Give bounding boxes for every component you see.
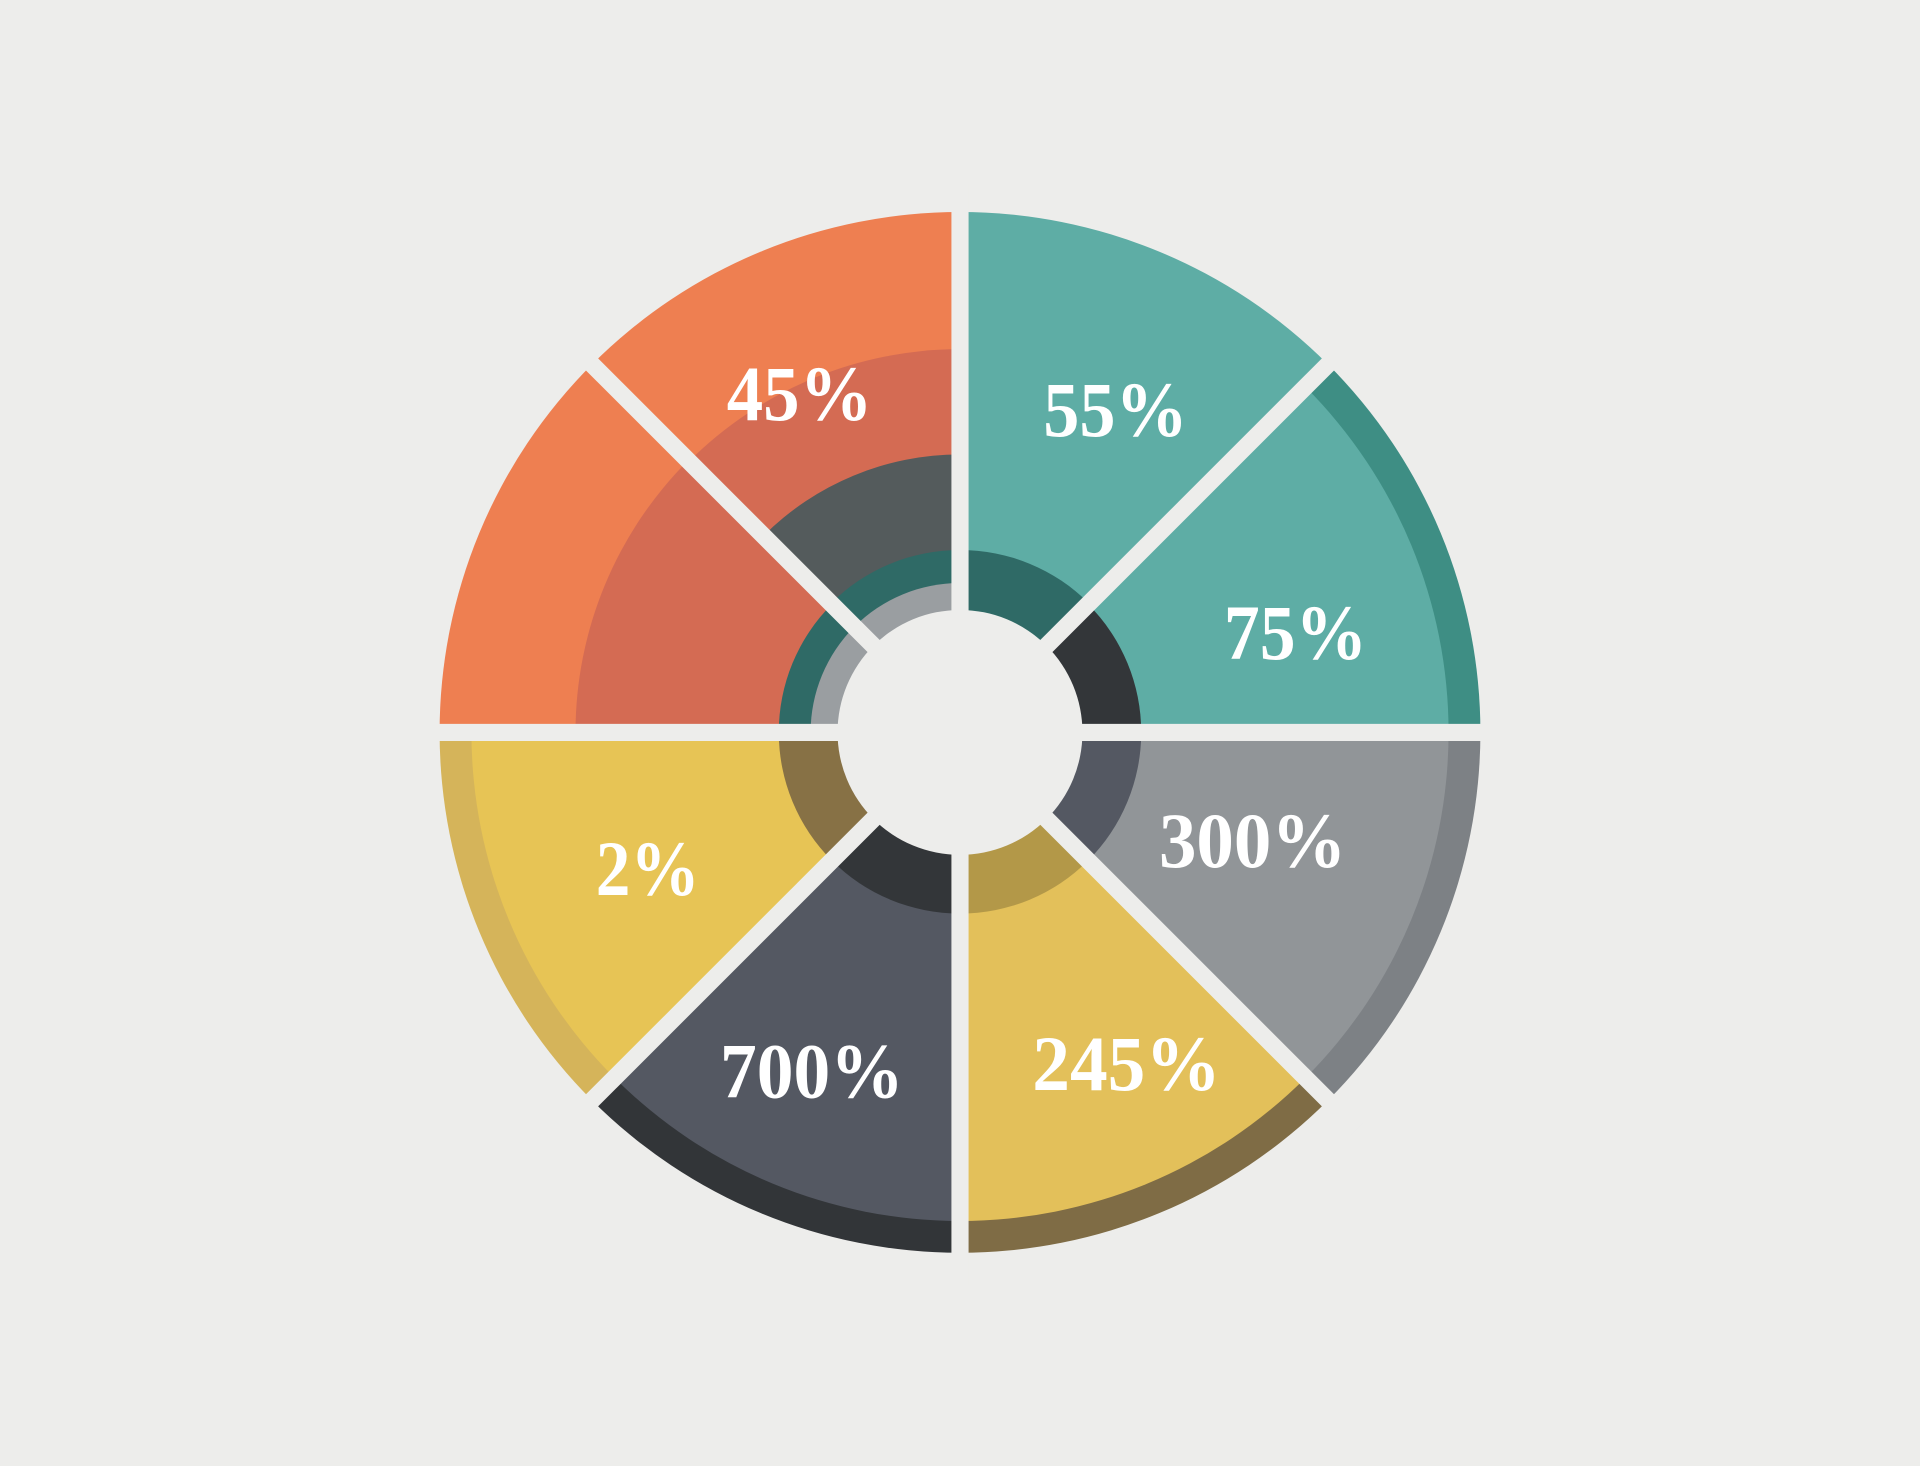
- segment: orange lower: [440, 370, 868, 724]
- segment: 2%: [440, 741, 868, 1094]
- donut chart: [440, 212, 1480, 1253]
- label: 245%: 245%: [1032, 1020, 1221, 1107]
- label: 300%: 300%: [1159, 797, 1346, 884]
- label: 75%: 75%: [1224, 589, 1367, 676]
- segment: 245%: [968, 824, 1322, 1253]
- label: 700%: 700%: [720, 1027, 904, 1114]
- label: 2%: 2%: [596, 825, 700, 912]
- segment: 75%: [1052, 370, 1480, 724]
- segment: 45%: [598, 212, 952, 640]
- label: 55%: 55%: [1043, 366, 1188, 453]
- segment: 700%: [598, 824, 952, 1253]
- segment: 55%: [968, 212, 1322, 640]
- segment: 300%: [1052, 741, 1480, 1094]
- label: 45%: 45%: [727, 350, 872, 437]
